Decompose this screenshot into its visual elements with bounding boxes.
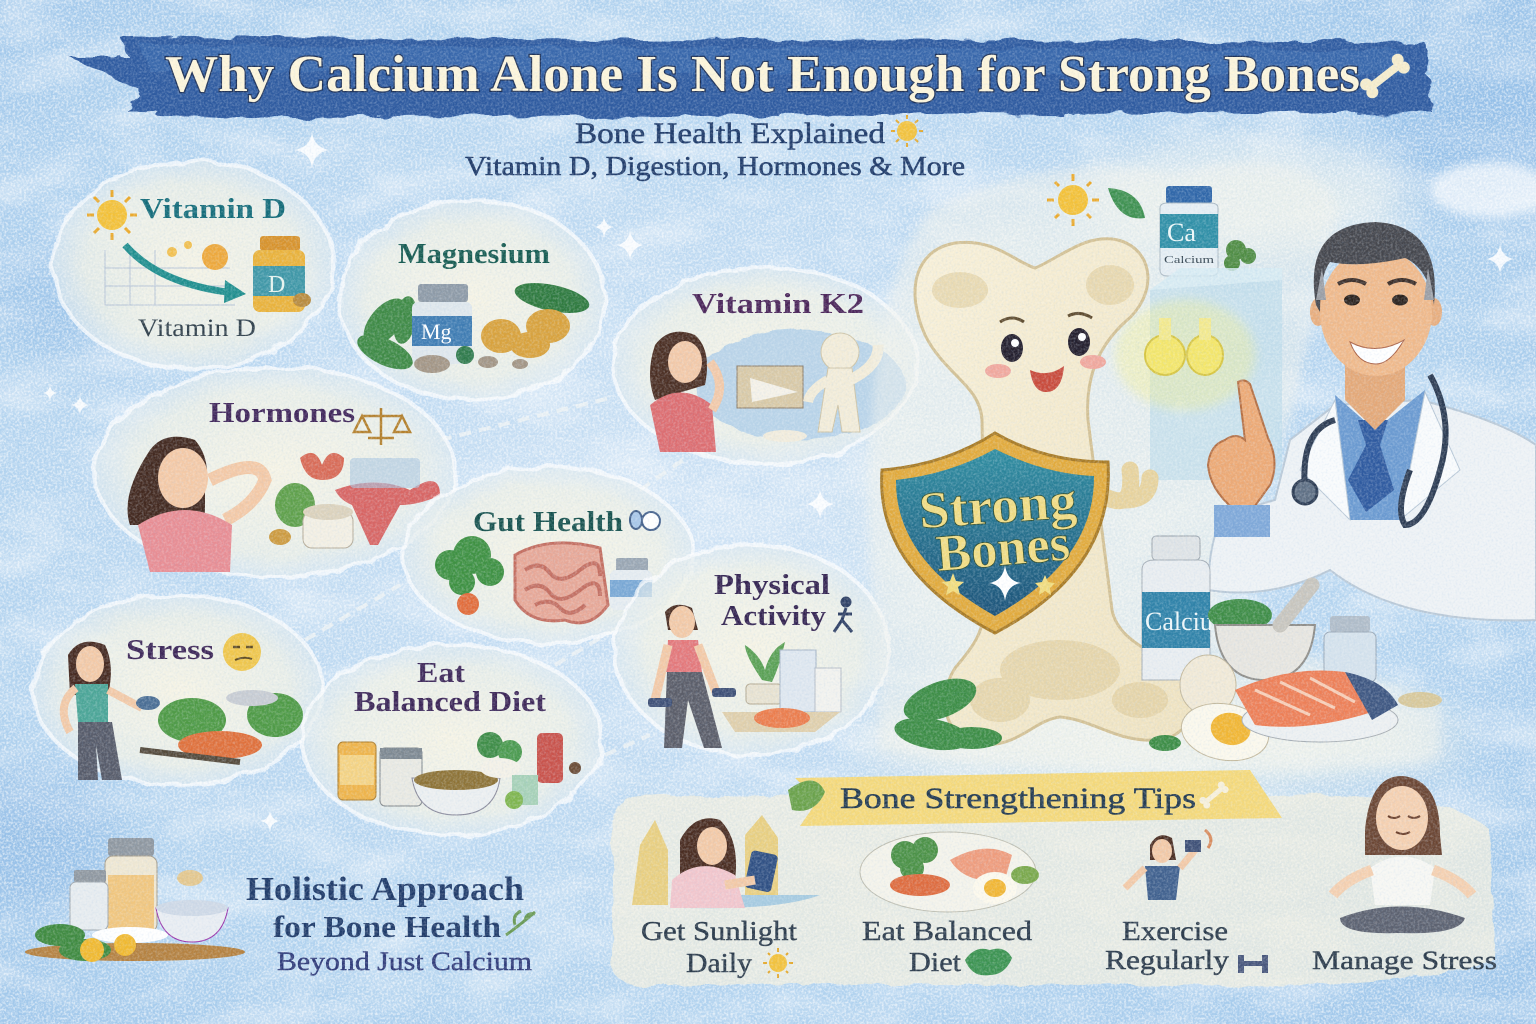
heading: Hormones: Hormones [209,397,355,429]
subtitle [465,117,965,181]
tip: eat balanced diet: Eat Balanced [862,916,1033,946]
tip: get sunlight daily: Daily [686,948,753,978]
envelope [737,366,803,408]
shield text: Strong [917,472,1079,540]
subtitle: Vitamin D, Digestion, Hormones & More [465,151,965,181]
panel: Vitamin D: Vitamin D [138,315,256,342]
woman with dumbbells [648,605,736,748]
panel: Holistic Approach [25,838,535,976]
panel: Physical Activity [615,545,889,755]
bone arm [1108,470,1150,501]
coat [1208,400,1536,620]
panel: Gut Health [403,467,693,643]
intestines [515,543,608,623]
salmon plate [722,708,840,732]
bone character [915,239,1193,745]
tips ribbon: Bone Strengthening Tips [840,782,1196,815]
holistic text: Beyond Just Calcium [277,947,532,976]
heading: Physical Activity: Activity [721,601,826,632]
broccoli [435,536,504,595]
greens and cup [269,483,353,548]
icon: sun [87,190,137,240]
neck and head [1345,355,1405,430]
icon: sprig [506,911,535,935]
heading: Gut Health: Gut Health [473,507,623,538]
tip: exercise regularly: Exercise [1122,916,1228,946]
icon: Ca bottle: Calcium [1164,254,1215,266]
icon: Ca bottle: Ca [1167,218,1196,247]
woman figure [128,437,265,572]
tip: exercise regularly: Regularly [1105,945,1230,975]
icon: face [223,633,261,671]
holistic text: Holistic Approach [246,871,524,908]
heading: Eat Balanced Diet [354,658,547,718]
stethoscope [1304,375,1446,525]
icon: Ca bottle [1160,186,1218,276]
woman figure [650,332,720,452]
supplement bottles and flowers [25,838,245,962]
icon: Mg bottle [412,284,472,364]
subtitle: Bone Health Explained [575,117,885,150]
tips ribbon [788,770,1282,826]
doctor [1208,222,1536,620]
tip: get sunlight daily [632,815,820,978]
leaves [352,277,592,376]
icon: subtitle sun [891,115,923,147]
dashed connectors [305,398,690,755]
icon: bacteria [630,511,660,530]
heading: Physical Activity: Physical [714,570,830,601]
heading: Physical Activity [714,570,830,632]
icon: leaf [1108,188,1145,218]
calcium bottle: Calciu [1145,607,1213,636]
bone face [985,313,1106,392]
woman figure [64,642,160,780]
spinach and mortar [1208,599,1272,631]
heading: Magnesium: Magnesium [398,239,550,270]
small bottle [1324,616,1376,682]
panel: Stress [33,595,323,785]
icon: walker [834,598,852,632]
leaves left of bone [892,670,1181,755]
heading: Stress: Stress [126,634,214,666]
panel: Magnesium [339,200,605,400]
hand pointing [1208,380,1275,510]
icon: vitamin D bottle: D [268,272,285,298]
tip: eat balanced diet [860,832,1039,977]
greens and bottles [477,732,581,809]
title banner [68,37,1432,118]
plant and boxes [745,642,841,712]
tip: get sunlight daily: Get Sunlight [641,916,798,946]
icon: top sun [1047,174,1099,226]
tip: manage stress: Manage Stress [1312,946,1497,975]
icon: title bone [1358,51,1412,101]
panel: Eat Balanced Diet [302,645,602,835]
jars [338,742,422,806]
bone figure [808,333,878,432]
heading: Vitamin K2: Vitamin K2 [692,289,864,320]
heading: Eat Balanced Diet: Balanced Diet [354,687,547,718]
panel: main hero cloud [869,163,1440,773]
shield [882,433,1108,633]
calcium bottle [1142,536,1213,680]
heading: Vitamin D: Vitamin D [140,193,286,225]
broccoli [1224,240,1256,271]
eggs [1180,655,1236,715]
thyroid and uterus [300,453,440,545]
sparkles [43,132,1514,832]
glass cube with capsules [1115,268,1282,480]
holistic text: for Bone Health [273,909,501,944]
bottle [610,558,652,610]
tip: eat balanced diet: Diet [909,947,962,977]
panel: Vitamin K2 [613,267,917,463]
salmon [1235,670,1398,742]
vegetables [140,690,303,762]
food group [892,536,1442,767]
icon: Mg bottle: Mg [421,319,452,344]
nuts and potatoes [481,309,570,358]
icon: scales [354,408,410,445]
holistic text [246,871,532,976]
panel: Vitamin D [53,161,333,369]
chart arrow [105,245,246,305]
tip: manage stress [1312,776,1497,975]
panel: Hormones [95,367,455,577]
title text: Why Calcium Alone Is Not Enough for Strong Bones [165,46,1360,103]
tip: exercise regularly [1105,830,1268,975]
icon: vitamin D bottle [253,236,311,312]
panel: bone strengthening tips [612,770,1497,986]
heading: Eat Balanced Diet: Eat [417,658,466,689]
shirt and tie [1335,390,1425,520]
bowl [412,770,500,815]
shield text [917,472,1079,583]
shield text: Bones [934,515,1072,583]
